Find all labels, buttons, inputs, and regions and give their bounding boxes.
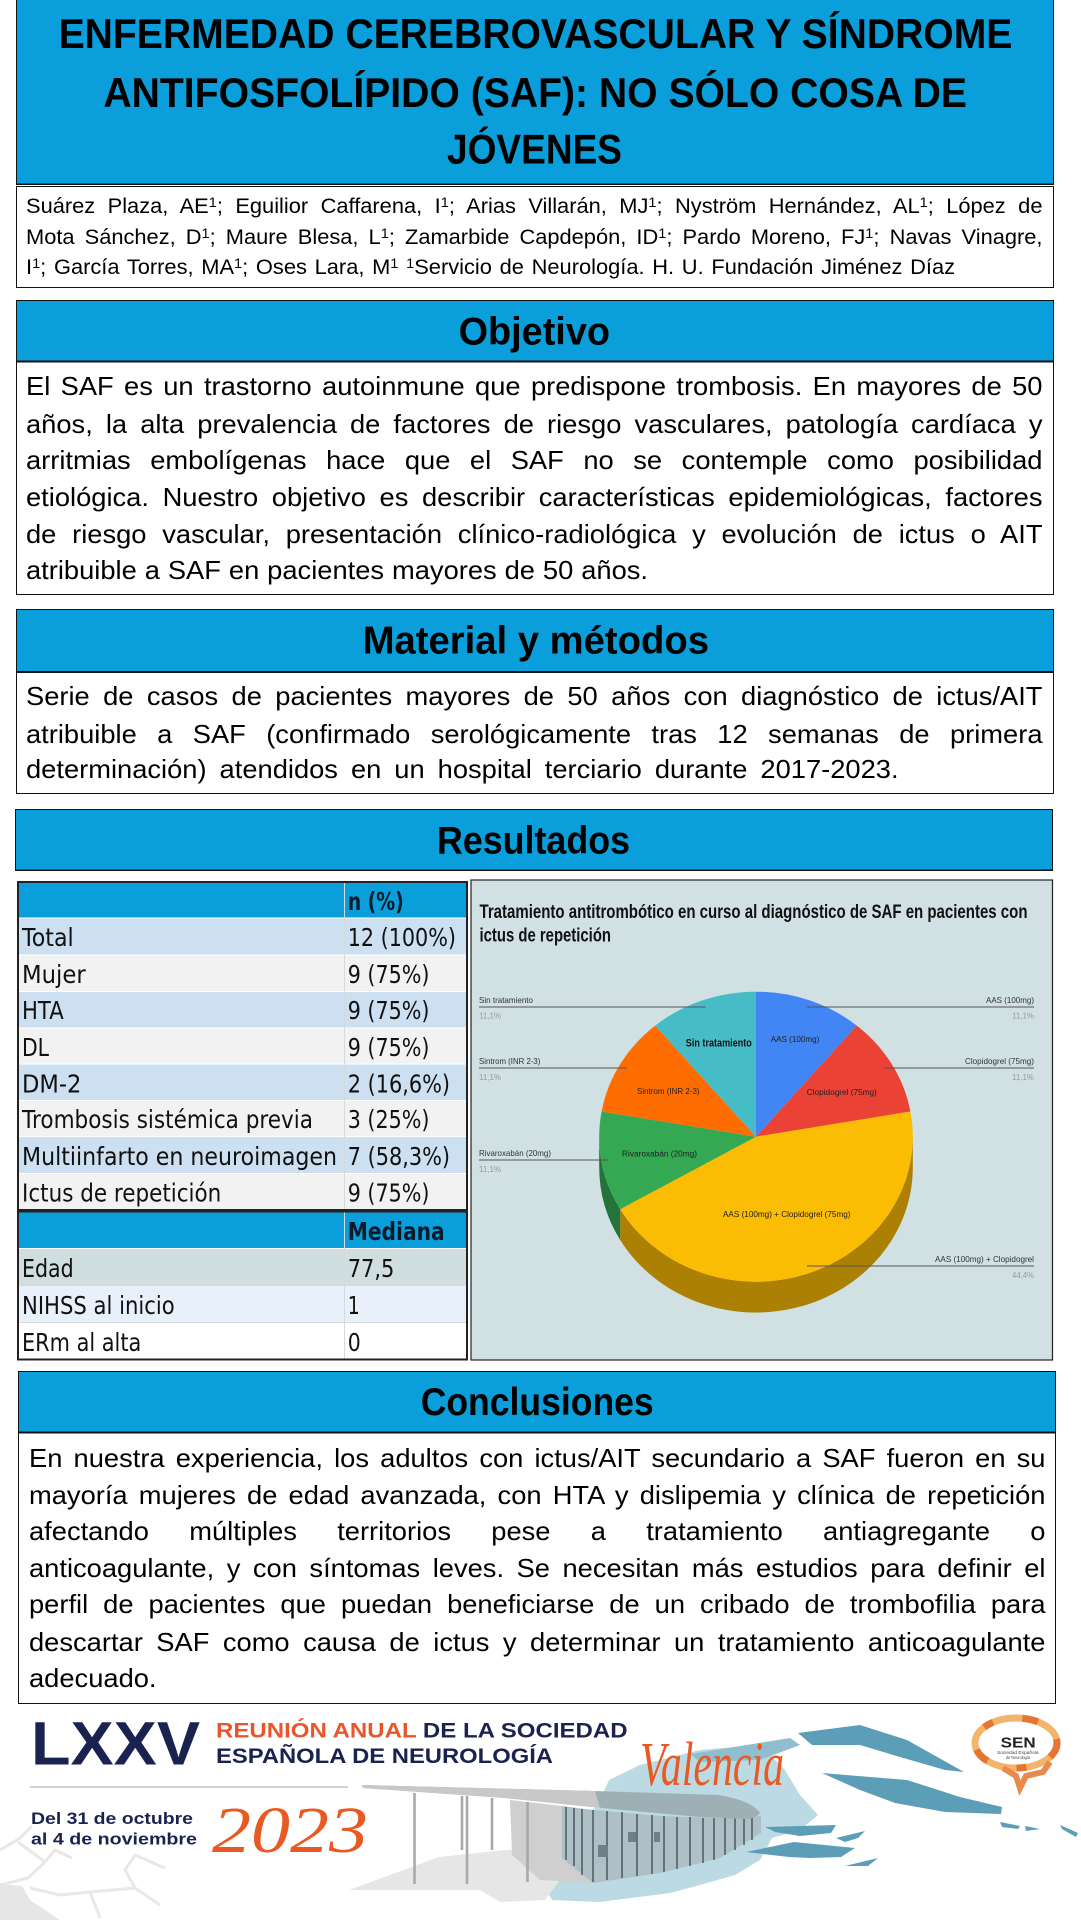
outside legend labels: 11,1% <box>479 1011 501 1021</box>
panel: conclusiones <box>18 1371 1056 1704</box>
heading: material y métodos <box>17 610 1053 673</box>
event name: REUNIÓN ANUAL DE LA SOCIEDAD <box>216 1718 628 1742</box>
table: resultados: n (%) <box>348 887 404 916</box>
outside legend labels: Rivaroxabán (20mg) <box>479 1148 551 1158</box>
footer banner <box>0 1709 1078 1920</box>
dates: Del 31 de octubre <box>31 1809 193 1828</box>
table: resultados: 1 <box>348 1291 360 1320</box>
icon: SEN logo: SEN <box>1001 1735 1036 1752</box>
text: conclusiones: En nuestra experiencia, los adultos con ictus/AIT secundario a SAF fueron en su <box>29 1443 1045 1473</box>
event name: ESPAÑOLA DE NEUROLOGÍA <box>216 1745 553 1768</box>
title panel <box>16 0 1054 185</box>
authors panel: Mota Sánchez, D1; Maure Blesa, L1; Zamarbide Capdepón, ID1; Pardo Moreno, FJ1; Navas Vinagre, <box>26 224 1043 248</box>
title panel: ENFERMEDAD CEREBROVASCULAR Y SÍNDROME <box>59 10 1012 57</box>
outside legend labels: 11,1% <box>479 1164 501 1174</box>
table: resultados: DL <box>22 1033 49 1062</box>
chart title <box>480 901 1028 947</box>
text: objetivo: años, la alta prevalencia de factores de riesgo vasculares, patología cardíaca y <box>26 409 1042 439</box>
outside legend labels: 11,1% <box>1012 1011 1034 1021</box>
outside legend labels: AAS (100mg) + Clopidogrel <box>935 1254 1034 1264</box>
table: resultados: 9 (75%) <box>348 960 429 989</box>
outside legend labels <box>479 995 1034 1280</box>
text: objetivo: arritmias embolígenas hace que el SAF no se contemple como posibilidad <box>26 445 1042 475</box>
table: resultados: 2 (16,6%) <box>348 1069 450 1098</box>
outside legend labels: 44,4% <box>1012 1270 1034 1280</box>
heading: material y métodos: Material y métodos <box>363 619 709 662</box>
authors panel <box>16 186 1054 288</box>
authors panel: Suárez Plaza, AE1; Eguilior Caffarena, I1; Arias Villarán, MJ1; Nyström Hernández, AL1; López de <box>26 194 1042 218</box>
icon: SEN logo: de Neurología <box>1006 1755 1030 1760</box>
table: resultados: 9 (75%) <box>348 1178 429 1207</box>
dates <box>31 1809 197 1849</box>
text: objetivo: El SAF es un trastorno autoinmune que predispone trombosis. En mayores de 50 <box>26 371 1042 401</box>
table: resultados: Total <box>21 923 74 952</box>
table: resultados: Ictus de repetición <box>22 1178 221 1207</box>
pie slice labels: Sintrom (INR 2-3) <box>637 1086 700 1096</box>
text: conclusiones <box>29 1443 1046 1693</box>
pie slice labels: Clopidogrel (75mg) <box>807 1087 877 1097</box>
heading: resultados <box>15 809 1053 871</box>
light watercolor wash <box>540 1745 818 1902</box>
text: conclusiones: mayoría mujeres de edad avanzada, con HTA y dislipemia y clínica de repetición <box>29 1480 1045 1510</box>
table: resultados: Mediana <box>348 1217 445 1246</box>
text: objetivo: atribuible a SAF en pacientes mayores de 50 años. <box>26 555 648 585</box>
text: material y métodos: atribuible a SAF (confirmado serológicamente tras 12 semanas de primera <box>26 719 1042 749</box>
text: material y métodos: determinación) atendidos en un hospital terciario durante 2017-2023. <box>26 754 899 784</box>
pie chart <box>599 992 913 1313</box>
icon: SEN logo <box>975 1718 1057 1788</box>
table: resultados <box>17 881 468 1360</box>
table: resultados: 0 <box>348 1328 361 1357</box>
table: resultados: Multiinfarto en neuroimagen <box>22 1142 337 1171</box>
text: objetivo: etiológica. Nuestro objetivo es describir características epidemiológicas, factores <box>26 482 1042 512</box>
text: conclusiones: anticoagulante, y con síntomas leves. Se necesitan más estudios para definir el <box>29 1553 1045 1583</box>
building: floor and shadow <box>349 1850 560 1902</box>
building: wall <box>510 1800 595 1883</box>
pie slice labels: AAS (100mg) <box>771 1034 820 1044</box>
text: conclusiones: afectando múltiples territorios pese a tratamiento antiagregante o <box>29 1516 1045 1546</box>
table: resultados: Mujer <box>22 960 87 989</box>
chart panel: tratamiento antitrombótico <box>470 879 1054 1361</box>
Valencia: Valencia <box>640 1731 784 1799</box>
leader lines <box>479 1007 1034 1266</box>
pie slice labels: AAS (100mg) + Clopidogrel (75mg) <box>723 1209 851 1219</box>
table: resultados: 9 (75%) <box>348 996 429 1025</box>
outside legend labels: 11,1% <box>1012 1072 1034 1082</box>
building: columns <box>414 1793 528 1884</box>
dates: al 4 de noviembre <box>31 1830 197 1849</box>
table: resultados: 3 (25%) <box>348 1105 429 1134</box>
table: resultados: Edad <box>22 1254 74 1283</box>
year 2023: 2023 <box>212 1794 368 1867</box>
icon: SEN logo: Sociedad Española <box>997 1750 1039 1755</box>
building: roof <box>362 1785 760 1819</box>
title panel: ANTIFOSFOLÍPIDO (SAF): NO SÓLO COSA DE <box>103 68 967 116</box>
dark watercolor splashes <box>746 1725 1078 1866</box>
event name <box>216 1718 628 1768</box>
outside legend labels: 11,1% <box>479 1072 501 1082</box>
pie slice labels: Sin tratamiento <box>686 1038 752 1050</box>
panel: material y métodos <box>16 609 1054 794</box>
outside legend labels: AAS (100mg) <box>986 995 1034 1005</box>
pie slice labels <box>622 1034 877 1219</box>
heading: conclusiones <box>19 1372 1055 1434</box>
authors panel: I1; García Torres, MA1; Oses Lara, M1 1Servicio de Neurología. H. U. Fundación Jiménez Díaz <box>26 255 955 279</box>
heading: objetivo: Objetivo <box>459 311 610 354</box>
chart title: ictus de repetición <box>480 925 611 947</box>
heading: resultados: Resultados <box>437 819 630 862</box>
text: objetivo: de riesgo vascular, presentación clínico-radiológica y evolución de ictus o AIT <box>26 518 1042 548</box>
text: material y métodos <box>26 681 1043 784</box>
panel: objetivo <box>16 300 1054 595</box>
title panel: JÓVENES <box>447 124 622 172</box>
outside legend labels: Sin tratamiento <box>479 995 533 1005</box>
text: material y métodos: Serie de casos de pacientes mayores de 50 años con diagnóstico de ictus/AIT <box>26 681 1042 711</box>
table: resultados: 77,5 <box>348 1254 394 1283</box>
text: conclusiones: descartar SAF como causa de ictus y determinar un tratamiento anticoagulante <box>29 1627 1045 1657</box>
text: conclusiones: adecuado. <box>29 1663 157 1693</box>
table: resultados: HTA <box>22 996 64 1025</box>
table: resultados: DM-2 <box>22 1069 81 1098</box>
table: resultados: ERm al alta <box>22 1328 141 1357</box>
decorative tree <box>0 1826 165 1920</box>
outside legend labels: Sintrom (INR 2-3) <box>479 1056 541 1066</box>
LXXV mark: LXXV <box>31 1709 200 1777</box>
heading: objetivo <box>17 301 1053 362</box>
table: resultados: 7 (58,3%) <box>348 1142 450 1171</box>
pie slice labels: Rivaroxabán (20mg) <box>622 1149 697 1159</box>
building: glass facade <box>562 1806 761 1883</box>
text: objetivo <box>26 371 1042 585</box>
table: resultados: 9 (75%) <box>348 1033 429 1062</box>
outside legend labels: Clopidogrel (75mg) <box>965 1056 1034 1066</box>
heading: conclusiones: Conclusiones <box>421 1381 654 1424</box>
text: conclusiones: perfil de pacientes que puedan beneficiarse de un cribado de trombofilia para <box>29 1589 1045 1619</box>
table: resultados: NIHSS al inicio <box>22 1291 175 1320</box>
table: resultados: Trombosis sistémica previa <box>21 1105 313 1134</box>
